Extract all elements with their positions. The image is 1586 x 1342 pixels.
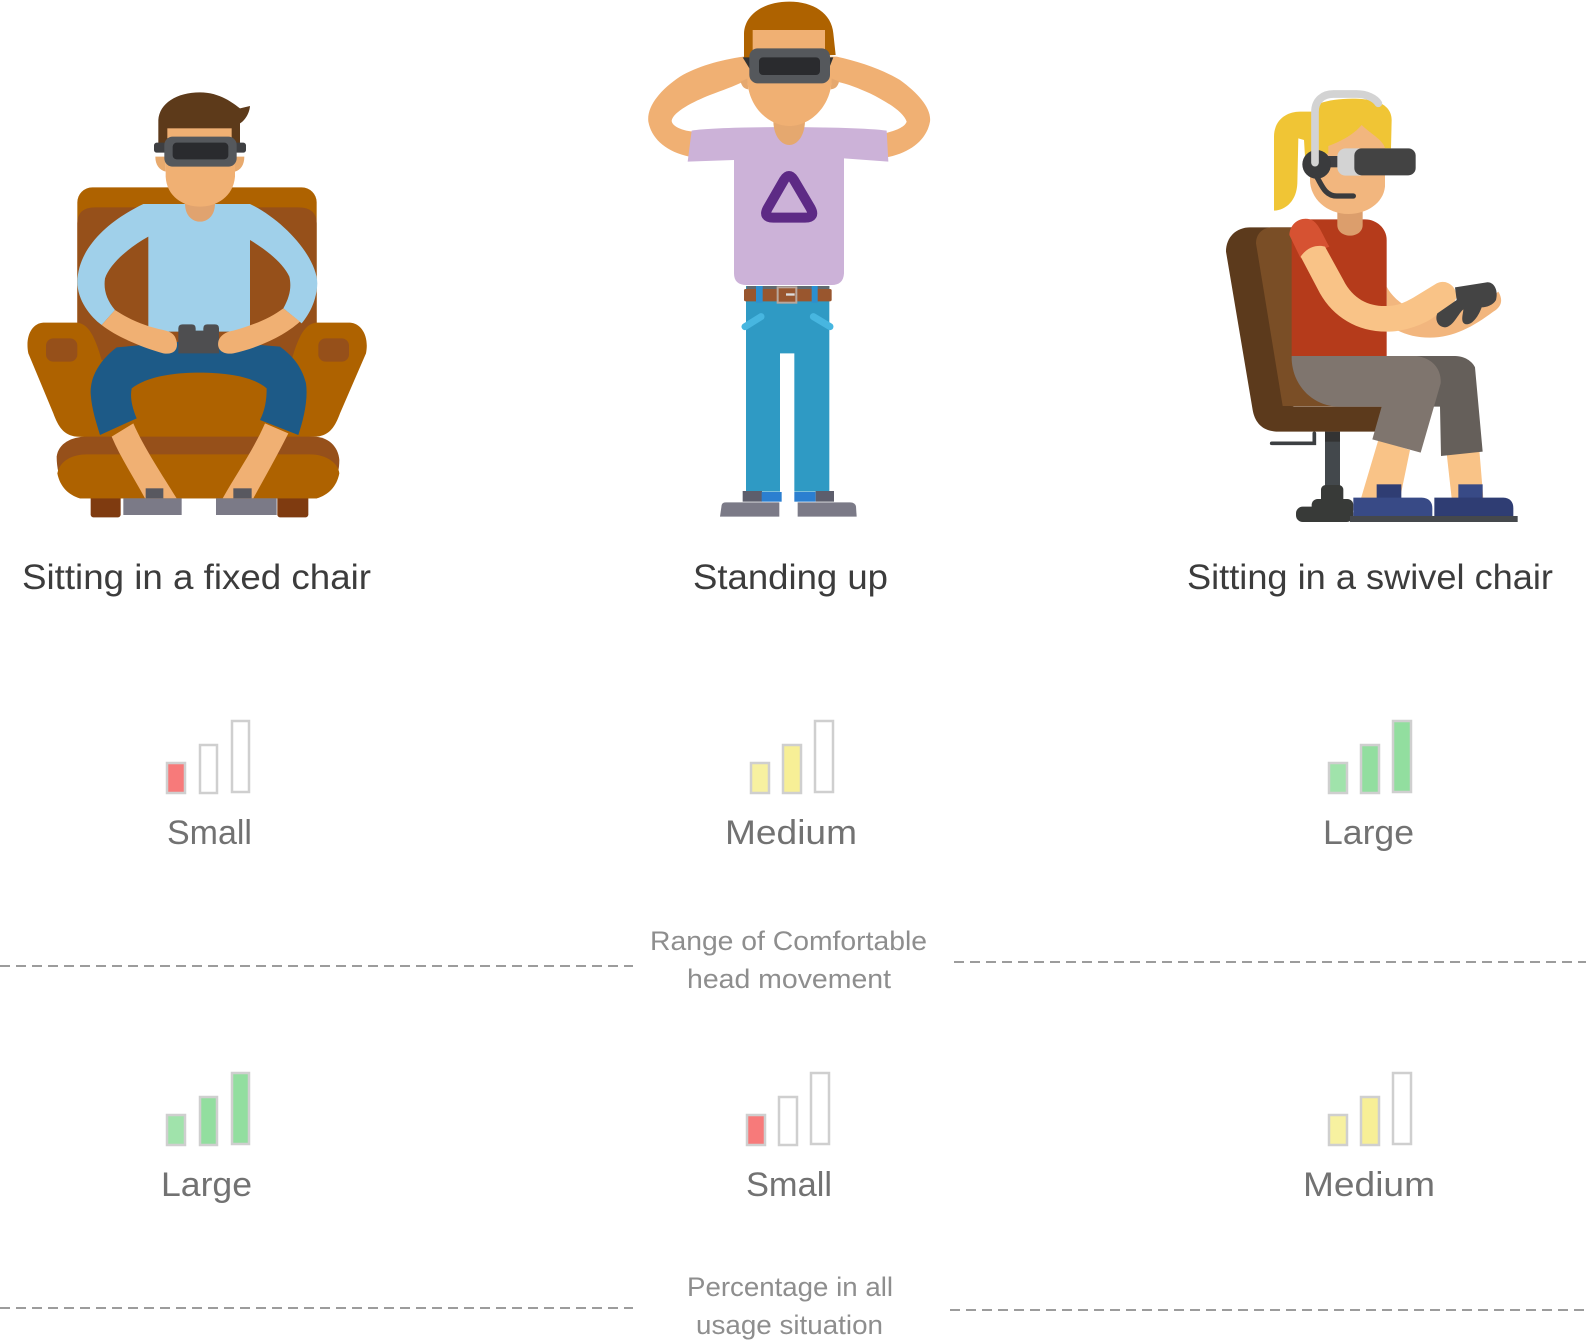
illustration: standing man [648,2,930,517]
armchair arms and seat [27,323,367,498]
rating label: medium: Medium [725,814,857,852]
divider label: range of comfortable head movement: Range of Comfortable [650,926,927,956]
controller [178,324,219,353]
shoes and floor [1350,484,1518,522]
legs [1361,440,1483,498]
head, hair and headset [1274,94,1416,214]
divider label: percentage in all usage situation: Percentage in all [687,1272,893,1302]
belt [744,286,832,303]
armchair legs [91,493,308,517]
near arm [1301,246,1457,332]
far arm [1387,287,1501,338]
shirt [77,204,317,332]
forearms [102,308,300,354]
shirt [1292,219,1387,356]
rating label: small: Small [746,1166,832,1204]
rating label: large: Large [161,1166,252,1204]
jeans [746,286,829,492]
upper body [648,2,930,285]
neck [185,203,215,222]
shirt [688,127,888,285]
shirt logo [766,176,812,218]
divider label: percentage in all usage situation [687,1272,893,1340]
neck [773,120,805,145]
divider label: range of comfortable head movement: head movement [687,964,892,994]
sleeve [1289,219,1329,258]
rating label: large: Large [1323,814,1414,852]
divider label: percentage in all usage situation: usage situation [696,1310,883,1340]
shoes [720,502,857,517]
armchair back [77,187,317,401]
cuffs [743,491,834,502]
lower body [720,286,857,517]
rating bars: large, swivel chair, head movement [1329,721,1411,793]
rating label: medium: Medium [1303,1166,1435,1204]
neck [1337,207,1363,236]
head with hair and VR goggles [154,92,250,207]
swivel chair [1226,227,1387,522]
illustration: man in fixed armchair [27,92,367,517]
rating bars: small, standing, usage share [747,1073,829,1145]
arms [648,57,930,158]
rating bars: small, fixed chair, head movement [167,721,249,793]
divider label: range of comfortable head movement [650,926,927,994]
shoes [123,488,277,515]
illustration: woman in swivel chair [1226,94,1518,522]
caption: fixed chair: Sitting in a fixed chair [22,558,371,597]
head with hair and VR goggles [741,2,839,126]
jeans [91,340,307,435]
controller [1436,282,1497,327]
pockets [745,317,830,327]
caption: swivel chair: Sitting in a swivel chair [1187,558,1553,597]
trousers [1292,356,1483,456]
rating bars: medium, standing, head movement [751,721,833,793]
rating label: small: Small [167,814,252,852]
caption: standing: Standing up [693,558,888,597]
rating bars: medium, swivel chair, usage share [1329,1073,1411,1145]
lower legs [112,423,288,498]
rating bars: large, fixed chair, usage share [167,1073,249,1145]
